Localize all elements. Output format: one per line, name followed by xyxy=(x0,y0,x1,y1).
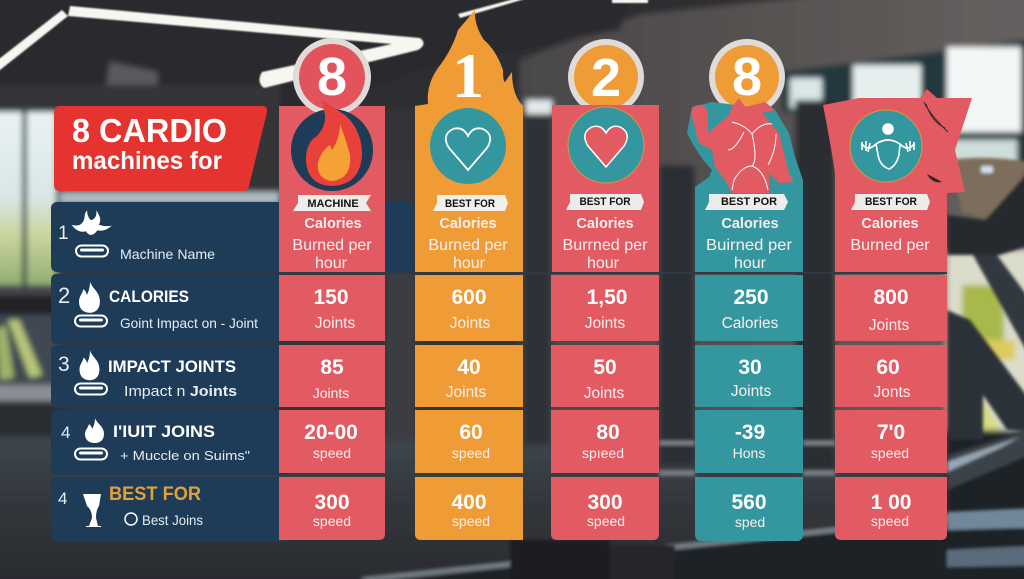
row 2: calories: 2 xyxy=(58,283,70,308)
column heading text: Calories xyxy=(439,216,497,232)
column heading text: Calories xyxy=(576,216,634,232)
icon: flame xyxy=(291,100,373,191)
values: 800 xyxy=(873,286,909,309)
banner: best for: BEST FOR xyxy=(865,196,917,208)
column 2: orange xyxy=(415,10,523,540)
right side scenery xyxy=(947,250,1024,440)
values: Joints xyxy=(584,385,624,402)
icon: athlete xyxy=(850,110,922,182)
banner: best for xyxy=(566,194,644,210)
values: Joints xyxy=(585,315,625,332)
column 2: orange: hour xyxy=(453,255,486,272)
banner: best for: BEST FOR xyxy=(580,196,631,208)
values xyxy=(279,275,385,540)
values: speed xyxy=(587,513,625,529)
values: speed xyxy=(452,445,490,461)
values xyxy=(835,275,947,540)
column 4: teal: Buirned per xyxy=(706,237,793,254)
row 3: impact joints: 3 xyxy=(58,353,70,376)
values: 20-00 xyxy=(304,421,358,444)
row 4: muscle joints: I'IUIT JOINS xyxy=(113,422,215,441)
row 5: best for xyxy=(51,477,291,542)
row 5: best for: BEST FOR xyxy=(109,484,201,505)
row 3: impact joints: IMPACT JOINTS xyxy=(108,357,236,376)
values: 250 xyxy=(733,286,769,309)
row 2: calories xyxy=(51,274,291,344)
values: Calories xyxy=(722,315,779,332)
row 3: impact joints xyxy=(51,345,291,408)
icon: heart outline xyxy=(430,108,506,184)
column heading text: Calories xyxy=(861,216,919,232)
row 3: impact joints: Impact n Joints xyxy=(124,383,237,400)
title banner: machines for xyxy=(72,147,222,175)
values: Jonts xyxy=(873,384,911,401)
values: 85 xyxy=(320,356,344,379)
row 1: machine name: 1 xyxy=(58,223,69,244)
title banner: 8 CARDIO xyxy=(72,112,227,149)
values: 40 xyxy=(457,356,481,379)
banner: machine: MACHINE xyxy=(307,198,359,210)
row 5: best for: 4 xyxy=(58,489,67,508)
banner: best for: BEST POR xyxy=(721,196,777,208)
values: speed xyxy=(313,513,351,529)
values: 60 xyxy=(459,421,483,444)
row 1: machine name: Machine Name xyxy=(120,246,215,262)
column 3: red: Burrned per xyxy=(562,237,648,254)
badge: number 8 xyxy=(293,38,371,116)
values: spıeed xyxy=(582,445,624,461)
banner: best for: BEST FOR xyxy=(445,198,495,210)
row 2: calories: Goint Impact on - Joint xyxy=(120,315,258,331)
values: 80 xyxy=(596,421,620,444)
values: sped xyxy=(735,514,765,530)
values: speed xyxy=(452,513,490,529)
values: Joints xyxy=(313,385,349,401)
banner: machine xyxy=(293,195,371,211)
values: 1 00 xyxy=(871,491,911,514)
window frames xyxy=(782,36,1024,172)
column 4: teal: hour xyxy=(734,255,767,272)
values: 1,50 xyxy=(587,286,627,309)
column 5: red flag xyxy=(823,89,972,540)
badge: number 8: 8 xyxy=(317,47,347,107)
values: Joints xyxy=(731,383,771,400)
values: 30 xyxy=(738,356,762,379)
values xyxy=(415,275,523,540)
row separator line xyxy=(279,272,947,274)
values: 600 xyxy=(451,286,487,309)
column 1: red machine xyxy=(279,38,385,540)
column 1: red machine: hour xyxy=(315,255,348,272)
badge: number 8: 8 xyxy=(732,47,762,107)
column 1: red machine: Burned per xyxy=(292,237,372,254)
column 4: teal xyxy=(687,39,803,541)
column 3: red xyxy=(551,39,659,540)
row 4: muscle joints: 4 xyxy=(61,423,70,442)
icon: heart xyxy=(568,107,644,183)
banner: best for xyxy=(705,194,788,210)
title banner xyxy=(54,106,267,191)
column 3: red: hour xyxy=(587,255,620,272)
values: 400 xyxy=(451,491,487,514)
panel: left row labels xyxy=(51,202,414,542)
values: 50 xyxy=(593,356,617,379)
badge: number 2 xyxy=(568,39,644,115)
badge: number 1: 1 xyxy=(452,40,484,111)
values: 150 xyxy=(313,286,349,309)
values: Joints xyxy=(450,315,490,332)
row 2: calories: CALORIES xyxy=(109,287,189,306)
values: Joints xyxy=(315,315,355,332)
values: 60 xyxy=(876,356,900,379)
badge: number 2: 2 xyxy=(591,48,621,108)
row 1: machine name xyxy=(51,202,414,272)
banner: best for xyxy=(851,194,930,210)
values: 560 xyxy=(731,491,767,514)
column heading text: Calories xyxy=(304,216,362,232)
values: 7'0 xyxy=(877,421,905,444)
values: -39 xyxy=(735,421,765,444)
row 4: muscle joints: + Muccle on Suims" xyxy=(120,448,250,463)
values: Joints xyxy=(869,317,909,334)
values xyxy=(551,275,659,540)
values: 300 xyxy=(314,491,350,514)
row 5: best for: Best Joins xyxy=(142,512,203,528)
row 4: muscle joints xyxy=(51,410,291,475)
column 2: orange: Burned per xyxy=(428,237,508,254)
values: Joints xyxy=(446,384,486,401)
icon: muscular torso xyxy=(692,98,794,193)
values xyxy=(695,275,803,541)
column heading text: Calories xyxy=(721,216,779,232)
badge: number 8 xyxy=(709,39,785,115)
values: speed xyxy=(871,513,909,529)
banner: best for xyxy=(433,195,508,211)
values: speed xyxy=(313,445,351,461)
values: speed xyxy=(871,445,909,461)
values: Hons xyxy=(733,445,765,461)
column 5: red flag: Burned per xyxy=(850,237,930,254)
values: 300 xyxy=(587,491,623,514)
